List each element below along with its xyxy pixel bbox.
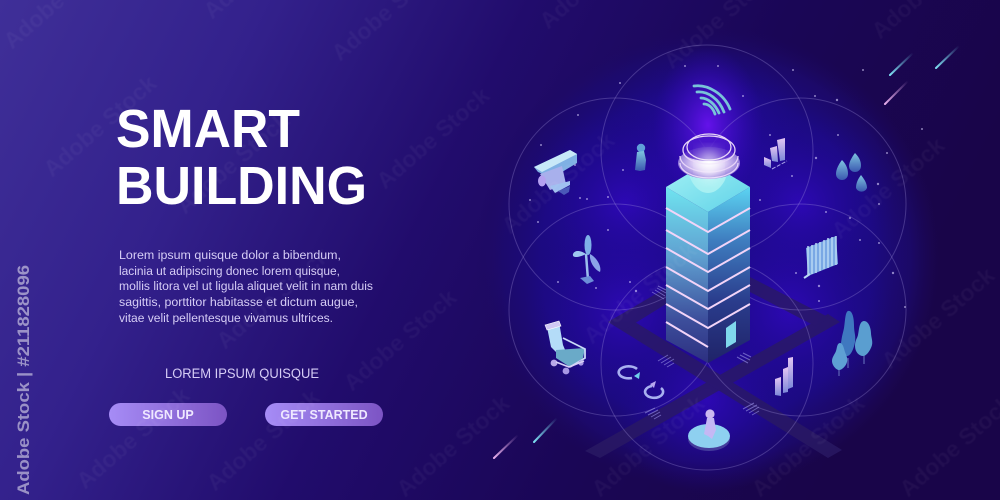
title: BUILDING [116, 156, 367, 216]
watermarks: Adobe Stock [171, 107, 295, 219]
building left face [666, 187, 708, 363]
icon: refresh arrows [619, 366, 663, 398]
watermarks: Adobe Stock [496, 127, 620, 239]
body text: lacinia ut adipiscing donec lorem quisque, [119, 264, 340, 278]
watermarks: Adobe Stock [371, 82, 495, 194]
icon: shopping cart [545, 321, 585, 374]
icon: water drops [836, 153, 867, 192]
icon: radiator [804, 236, 838, 278]
body text: mollis litora vel ut ligula aliquet velit in nam duis [119, 279, 373, 293]
button: get started [265, 403, 383, 426]
button: sign up: SIGN UP [142, 408, 194, 422]
floor stripes [666, 208, 750, 347]
vertical stock id text: Adobe Stock | #211828096 [14, 265, 33, 495]
sensor range circles [509, 45, 906, 470]
button: get started: GET STARTED [280, 408, 368, 422]
watermarks: Adobe Stock [201, 384, 325, 496]
watermarks: Adobe Stock [211, 242, 335, 354]
watermarks: Adobe Stock [391, 390, 515, 500]
button: sign up [109, 403, 227, 426]
watermarks: Adobe Stock [338, 284, 462, 396]
icon: trees [832, 311, 872, 376]
icon: wind turbine [573, 235, 600, 284]
watermarks: Adobe Stock [71, 382, 195, 494]
watermarks: Adobe Stock [826, 132, 950, 244]
road network [585, 277, 842, 458]
icon: wifi signal [694, 86, 730, 114]
roof dome sensor [678, 133, 740, 193]
glow field behind the building [475, 26, 939, 495]
watermarks: Adobe Stock [38, 70, 162, 182]
door [726, 321, 736, 348]
icon: person on platform [688, 409, 730, 451]
icon: security camera [534, 150, 577, 195]
star dots [529, 65, 923, 308]
subheading: LOREM IPSUM QUISQUE [165, 366, 319, 381]
icon: walking person [635, 144, 646, 171]
watermarks: Adobe Stock [586, 390, 710, 500]
watermarks: Adobe Stock [578, 237, 702, 349]
body text: sagittis, porttitor habitasse et dictum augue, [119, 295, 358, 309]
body text: vitae velit pellentesque vivamus ultrices. [119, 311, 333, 325]
watermarks: Adobe Stock [876, 262, 1000, 374]
building right face [708, 187, 750, 363]
icon: small bar chart [764, 138, 787, 169]
title: SMART [116, 99, 300, 159]
icon: bar chart [775, 357, 793, 396]
building with smart dome [666, 133, 750, 363]
crosswalk markings [645, 286, 759, 419]
watermarks: Adobe Stock [746, 390, 870, 500]
shooting stars [494, 46, 959, 458]
building roof [666, 162, 750, 212]
body text: Lorem ipsum quisque dolor a bibendum, [119, 248, 341, 262]
